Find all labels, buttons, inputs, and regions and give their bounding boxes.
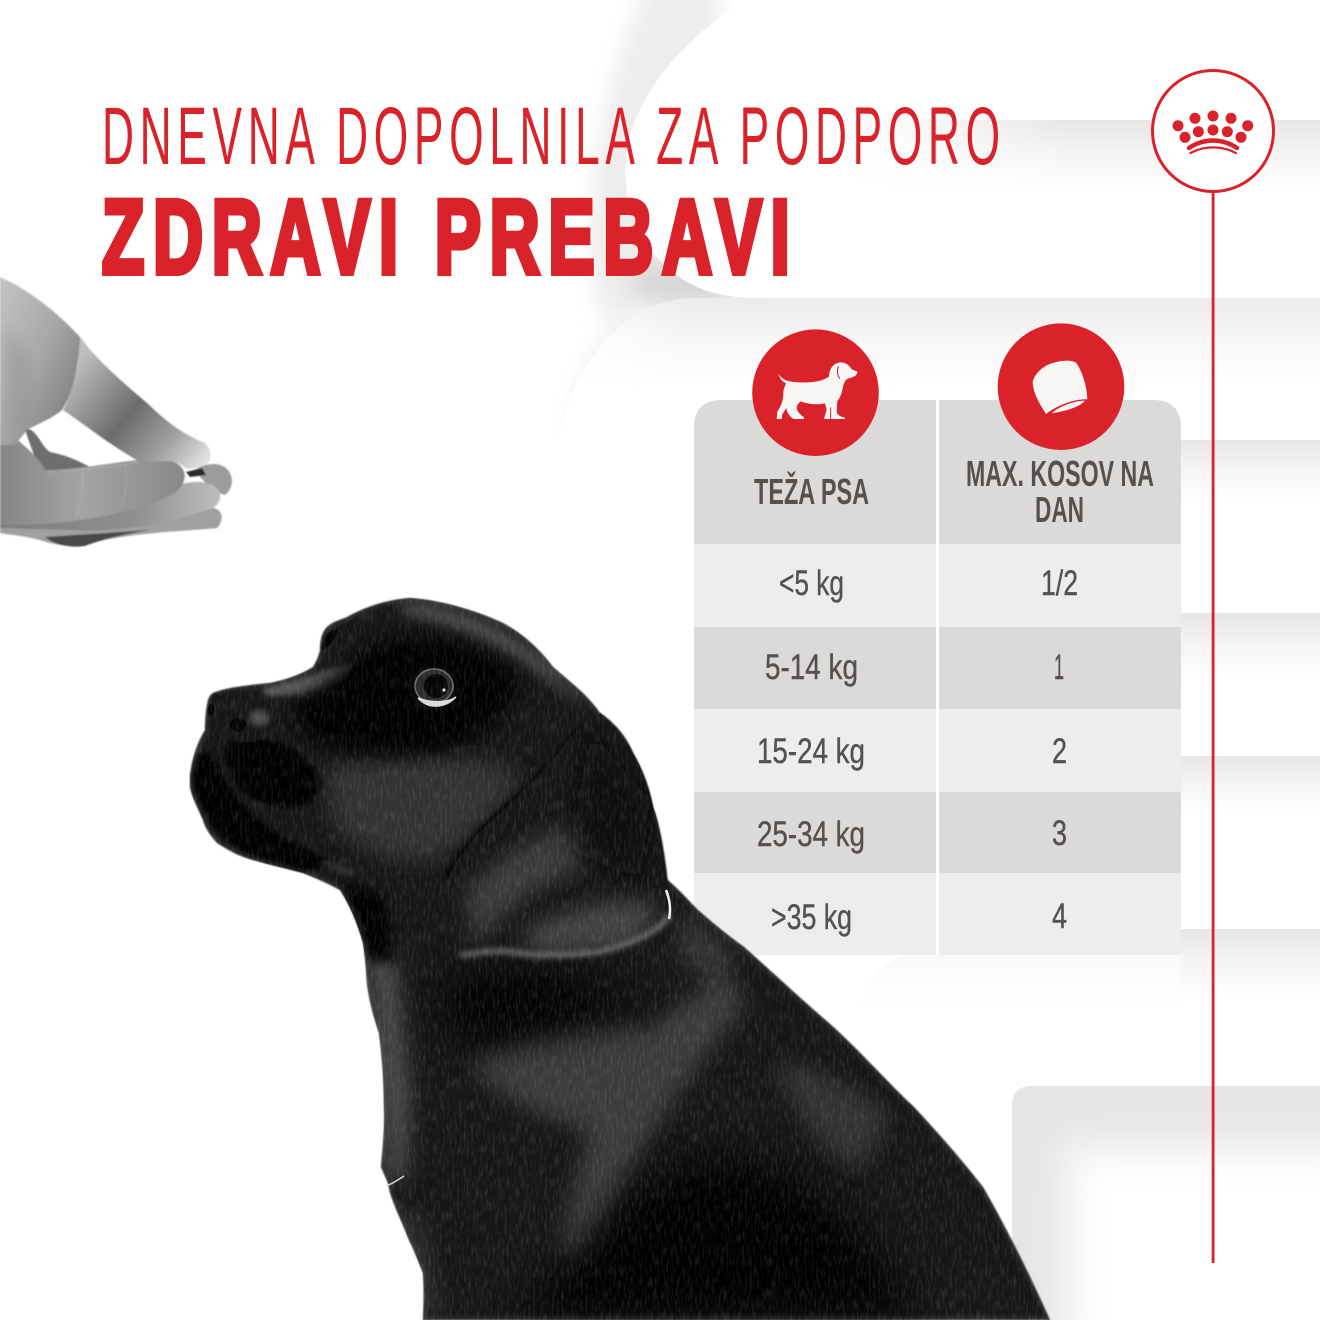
row: over 35 kg: >35 kg: [771, 898, 852, 937]
row: 5-14 kg: [694, 627, 1181, 709]
table header: max kibbles per day: DAN: [1035, 489, 1084, 530]
row: under 5 kg: [694, 544, 1181, 627]
row: under 5 kg: 1/2: [1041, 564, 1078, 603]
brand logo: crown in circle with vertical line: [1152, 70, 1274, 1263]
back fold finger: [25, 429, 92, 472]
row: 25-34 kg: 25-34 kg: [757, 815, 865, 854]
row: 5-14 kg: 1: [1054, 648, 1064, 687]
dog silhouette: [190, 598, 1050, 1320]
photo: hand holding kibble: [0, 277, 232, 547]
forehead highlight: [400, 602, 590, 710]
row: 15-24 kg: [694, 709, 1181, 792]
deep shadow under ear and on the lower body: [440, 971, 920, 1320]
back of hand: [0, 277, 80, 445]
row: over 35 kg: 4: [1052, 897, 1067, 936]
dog ear: [443, 713, 670, 957]
row: 25-34 kg: [694, 792, 1181, 873]
jaw fold highlight: [322, 862, 352, 874]
index finger: [63, 337, 211, 469]
table header: max kibbles per day: MAX. KOSOV NA: [966, 453, 1154, 494]
neck dark under jaw: [340, 885, 395, 960]
row: 15-24 kg: 2: [1052, 732, 1067, 771]
ear lower rim light: [460, 915, 670, 955]
face mid-grey cheek: [325, 755, 520, 862]
lower finger: [0, 508, 222, 546]
title line 2: ZDRAVI PREBAVI: [102, 177, 790, 295]
title: [102, 89, 1000, 295]
background: soft rounded shapes: [588, 0, 1320, 1320]
dosage table: [694, 400, 1181, 955]
rim light: [190, 598, 1050, 1320]
black shadow around eye and muzzle: [290, 636, 520, 756]
row: 15-24 kg: 15-24 kg: [757, 732, 865, 771]
knuckle shading: [5, 330, 33, 435]
table header: max kibbles per day: [939, 400, 1181, 544]
muzzle highlight: [262, 664, 352, 696]
icon: kibble in red circle: [998, 323, 1124, 450]
dog fur shading: [190, 598, 1050, 1320]
title line 1: DNEVNA DOPOLNILA ZA PODPORO: [102, 89, 1000, 181]
row: 25-34 kg: 3: [1052, 814, 1067, 853]
dog chest fold: [386, 1176, 404, 1186]
table header: dog weight: TEŽA PSA: [754, 470, 869, 512]
thumb creases: [48, 460, 150, 518]
middle finger: [0, 482, 220, 531]
dog eye: [408, 666, 460, 710]
kibble in fingers: [186, 464, 232, 495]
row: under 5 kg: <5 kg: [779, 564, 844, 603]
photo: black labrador puppy: [180, 590, 1060, 1320]
thumb: [0, 438, 185, 525]
chest and shoulder highlights: [368, 910, 890, 1320]
dog nose: [208, 693, 276, 742]
icon: dog in red circle: [752, 329, 879, 456]
dog fur texture: [180, 590, 1060, 1320]
row: over 35 kg: [694, 873, 1181, 955]
row: 5-14 kg: 5-14 kg: [765, 648, 858, 687]
dog far ear bump: [322, 630, 338, 650]
table header: dog weight: [694, 400, 936, 544]
crease between ear and cheek: [448, 728, 582, 880]
